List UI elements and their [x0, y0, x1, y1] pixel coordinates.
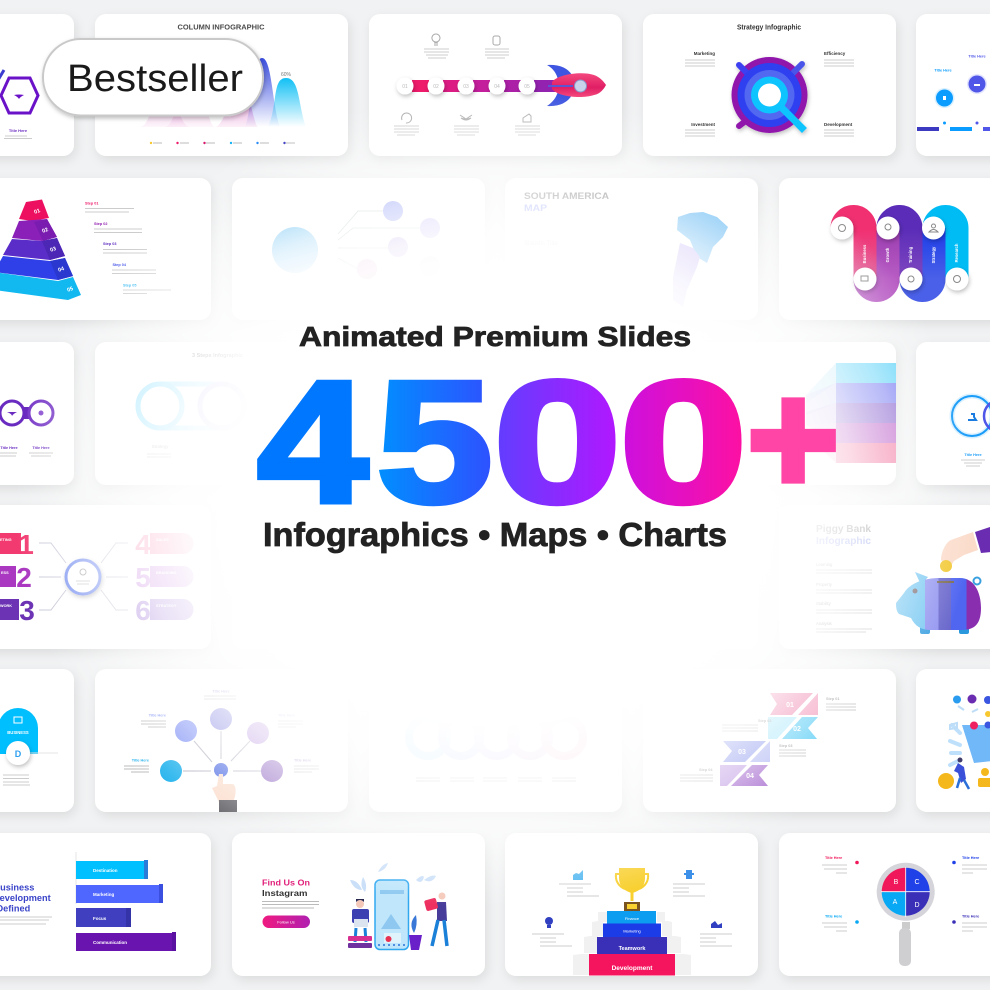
panel: zigzag steps — [643, 669, 896, 812]
right labels: SALES — [156, 538, 169, 542]
heading — [262, 878, 310, 898]
chart: horizontal bars: Destination — [93, 868, 118, 873]
labels — [416, 778, 576, 781]
step captions: Step 02 — [758, 719, 772, 723]
panel: radial touch — [95, 669, 348, 812]
text: Title Here — [964, 453, 982, 457]
icon: magnifier with puzzle: C — [914, 879, 920, 886]
timeline nodes: 04 — [494, 84, 500, 90]
left numbers: 2 — [16, 562, 32, 593]
right labels: BRANDING — [156, 571, 177, 575]
spokes — [183, 731, 261, 771]
text — [961, 453, 985, 466]
big number: 4500: 0 — [619, 346, 748, 539]
ribbon labels: Growth — [885, 247, 890, 262]
chart: arrow ribbons: 02 — [793, 726, 801, 733]
panel: rocket timeline — [369, 0, 622, 156]
left labels: WORK — [0, 604, 12, 608]
node captions — [132, 690, 311, 762]
timeline nodes: 02 — [433, 84, 439, 90]
heading: Piggy Bank — [816, 524, 871, 535]
step captions: Step 01 — [826, 697, 840, 701]
text: Title Here — [32, 446, 50, 450]
timeline nodes: 01 — [402, 84, 408, 90]
left numbers: 1 — [18, 529, 34, 560]
big number: 4500: 4 — [257, 344, 368, 539]
timeline nodes — [396, 78, 536, 94]
step captions: Step 04 — [699, 768, 713, 772]
illustration: phone — [375, 880, 408, 950]
chart: horizontal bars: Marketing — [93, 892, 115, 897]
callout titles: Title Here — [825, 856, 842, 860]
callout dots — [855, 861, 956, 924]
panel: column infographic — [95, 14, 348, 156]
stair steps: Marketing — [623, 928, 641, 934]
panel: 3 steps — [95, 342, 348, 485]
timeline nodes: 03 — [463, 84, 469, 90]
callout titles: Title Here — [962, 856, 979, 860]
connector bars — [412, 80, 556, 92]
node icons — [838, 224, 960, 282]
right numbers: 4 — [135, 529, 151, 560]
ribbon labels: Business — [862, 244, 867, 263]
big number: 4500 — [257, 344, 748, 539]
icon: magnifier with puzzle: A — [893, 899, 898, 906]
heading: COLUMN INFOGRAPHIC — [178, 24, 264, 32]
right ribbons — [150, 533, 194, 620]
panel: funnel illustration — [916, 669, 990, 812]
chart: arrow ribbons — [720, 693, 818, 786]
side stairs — [573, 912, 691, 975]
step text: Step 04 — [112, 263, 127, 267]
description — [262, 902, 319, 908]
rings — [138, 384, 244, 428]
panel: instagram — [232, 833, 485, 976]
label descriptions — [685, 60, 854, 136]
panel: south america map — [505, 178, 758, 320]
ring icons — [952, 396, 990, 436]
sphere — [6, 741, 58, 765]
right numbers: 6 — [135, 595, 151, 626]
icon: magnifier with puzzle: D — [914, 902, 920, 909]
callout titles: Title Here — [962, 914, 979, 918]
heading — [0, 882, 51, 914]
ribbon labels — [862, 243, 959, 263]
chart legend — [150, 142, 295, 144]
text — [934, 54, 986, 72]
list: Learning — [816, 562, 833, 567]
branches — [338, 201, 440, 279]
step captions: Step 03 — [779, 744, 793, 748]
axis — [75, 852, 77, 904]
illustration: hand and coin — [940, 527, 990, 572]
side text — [532, 884, 732, 946]
description — [3, 775, 30, 785]
chart: 3D pyramid: 01 — [33, 208, 41, 216]
panel: hidden middle slide B — [505, 505, 758, 649]
chart: arrow ribbons: 01 — [786, 702, 794, 709]
illustration: funnel — [950, 725, 990, 765]
text blocks — [394, 49, 540, 135]
labels: Marketing — [694, 51, 715, 56]
icon: trophy — [616, 868, 648, 911]
social icons — [950, 694, 990, 730]
panel: funnel arch — [0, 669, 74, 812]
button: Follow Us — [277, 920, 295, 924]
left labels — [0, 538, 12, 608]
icon: magnifier with puzzle — [877, 863, 935, 966]
node captions: Title Here — [132, 758, 149, 762]
subheading: infographics, maps, charts: Infographics • Maps • Charts — [263, 516, 727, 553]
main circle — [272, 227, 318, 273]
ribbon labels: Research — [954, 243, 959, 262]
step text: Step 01 — [85, 202, 99, 206]
illustration: pointing hand — [212, 774, 237, 812]
illustration: plant and standing person — [409, 892, 447, 950]
stair steps: Development — [612, 965, 653, 972]
step text: Step 05 — [123, 284, 137, 288]
badge: bestseller: Bestseller — [67, 58, 243, 100]
caption lines — [680, 704, 856, 781]
list — [816, 562, 833, 626]
connector lines — [39, 543, 128, 610]
caption lines — [124, 696, 319, 772]
panel: business development — [0, 833, 211, 976]
text: Title Here — [0, 446, 18, 450]
list: Analysis — [816, 621, 832, 626]
nodes — [160, 708, 283, 782]
target diagram — [732, 57, 808, 133]
step captions — [699, 697, 840, 772]
chart: horizontal bars: Communication — [93, 940, 127, 945]
chart: horizontal bars: Focus — [93, 916, 107, 921]
timeline bar — [917, 122, 990, 131]
icon: hexagon — [0, 70, 38, 113]
rings — [409, 718, 583, 756]
big number: 4500: 0 — [493, 346, 622, 539]
description — [0, 917, 52, 924]
left labels: ESS — [1, 571, 9, 575]
list: Stability — [816, 601, 832, 606]
text: title here: Title Here — [9, 128, 28, 133]
step text: Step 02 — [94, 222, 108, 226]
panel: blue timeline — [916, 14, 990, 156]
list: Property — [816, 582, 833, 587]
stair steps — [589, 911, 675, 976]
right labels: STRATEGY — [156, 604, 177, 608]
big number: 4500: 5 — [376, 344, 493, 539]
labels: Investment — [691, 122, 715, 127]
icon: magnifier with puzzle: B — [894, 879, 899, 886]
chart: 3D pyramid: 02 — [41, 227, 49, 235]
map heading: SOUTH AMERICA — [524, 191, 609, 202]
text — [0, 446, 53, 456]
statistic label: Statistic Title — [524, 241, 558, 247]
illustration: person pushing coin — [938, 758, 990, 789]
chart: arrow ribbons: 04 — [746, 773, 754, 780]
panel: numbered hub — [0, 505, 211, 649]
diagram: winding ribbon — [842, 217, 968, 290]
chart: arrow ribbons: 03 — [738, 749, 746, 756]
side icons — [545, 870, 722, 928]
icons: outline row — [402, 0, 531, 123]
left numbers — [16, 529, 35, 626]
chart: 3D pyramid: 05 — [66, 286, 74, 294]
badge: bestseller — [43, 39, 263, 116]
label: Strategy — [152, 444, 169, 449]
heading — [816, 524, 871, 547]
right numbers — [135, 529, 151, 626]
panel: ribbon stack — [643, 342, 896, 485]
stair steps: Teamwork — [619, 946, 646, 952]
stair steps: Finance — [625, 916, 640, 921]
panel: piggy bank — [779, 505, 990, 649]
right labels — [156, 538, 177, 608]
ribbon nodes — [830, 216, 968, 290]
callout titles: Title Here — [825, 914, 842, 918]
node captions: Title Here — [278, 714, 295, 718]
right numbers: 5 — [135, 562, 151, 593]
markers — [934, 74, 987, 108]
headline: animated premium slides: Animated Premium Slides — [299, 321, 691, 352]
central white fade — [15, 92, 975, 908]
chart: 3D pyramid: 03 — [49, 246, 57, 254]
panel: snake process — [779, 178, 990, 320]
labels: Development — [824, 122, 853, 127]
chart: horizontal bars — [76, 860, 176, 951]
illustration: leaves — [350, 863, 436, 892]
list descriptions — [816, 570, 872, 632]
ribbon labels: Strategy — [931, 246, 936, 263]
panel: stairs — [505, 833, 758, 976]
panel: hidden centre slide — [369, 342, 622, 485]
panel: hidden middle slide A — [232, 505, 485, 649]
timeline nodes: 05 — [524, 84, 530, 90]
chart: 3D pyramid: 04 — [57, 266, 66, 274]
chart: column hills — [140, 58, 306, 127]
callout titles — [825, 856, 979, 918]
panel: pyramid — [0, 178, 211, 320]
map: South America — [673, 212, 728, 307]
panel: ring chain — [369, 669, 622, 812]
node captions: Title Here — [294, 758, 311, 762]
map heading — [524, 191, 609, 214]
panel: strategy infographic — [643, 14, 896, 156]
arch badge: BUSINESS — [7, 730, 29, 735]
hub circle — [66, 560, 100, 594]
text: Title Here — [934, 68, 952, 72]
illustration: seated person — [348, 899, 372, 948]
heading: 3 Steps Infographic — [192, 353, 243, 359]
map heading: MAP — [524, 203, 548, 214]
heading: Find Us On — [262, 878, 310, 888]
step text — [85, 202, 137, 288]
labels: Efficiency — [824, 51, 846, 56]
text: Title Here — [968, 54, 986, 58]
chart: wedge stack — [806, 363, 896, 463]
icon: rocket — [547, 65, 606, 106]
panel: linked rings — [0, 342, 74, 485]
diagram: dumbbell — [0, 401, 53, 425]
node captions: Title Here — [212, 690, 230, 694]
label — [147, 444, 171, 457]
button — [262, 916, 310, 928]
heading: Infographic — [816, 536, 871, 547]
ribbon labels: Training — [908, 246, 913, 263]
node captions: Title Here — [149, 714, 166, 718]
text: title here — [4, 128, 32, 138]
chart: 3D pyramid — [0, 200, 81, 300]
panel: ring slide — [916, 342, 990, 485]
heading: Strategy Infographic — [737, 24, 801, 32]
step text: Step 03 — [103, 242, 117, 246]
left ribbons — [0, 533, 21, 620]
sphere: D — [15, 749, 22, 759]
labels — [691, 51, 853, 127]
panel: mind map — [232, 178, 485, 320]
left numbers: 3 — [19, 595, 35, 626]
chart: column hills: 60% — [281, 72, 292, 78]
plus sign: + — [747, 351, 839, 527]
illustration: piggy bank — [896, 572, 981, 634]
heading: Instagram — [262, 888, 308, 898]
callout lines — [822, 865, 987, 931]
panel: hexagon slide — [0, 14, 74, 156]
step descriptions — [85, 208, 171, 294]
arch badge — [0, 708, 38, 754]
panel: puzzle magnifier — [779, 833, 990, 976]
left labels: ETING — [0, 538, 12, 542]
